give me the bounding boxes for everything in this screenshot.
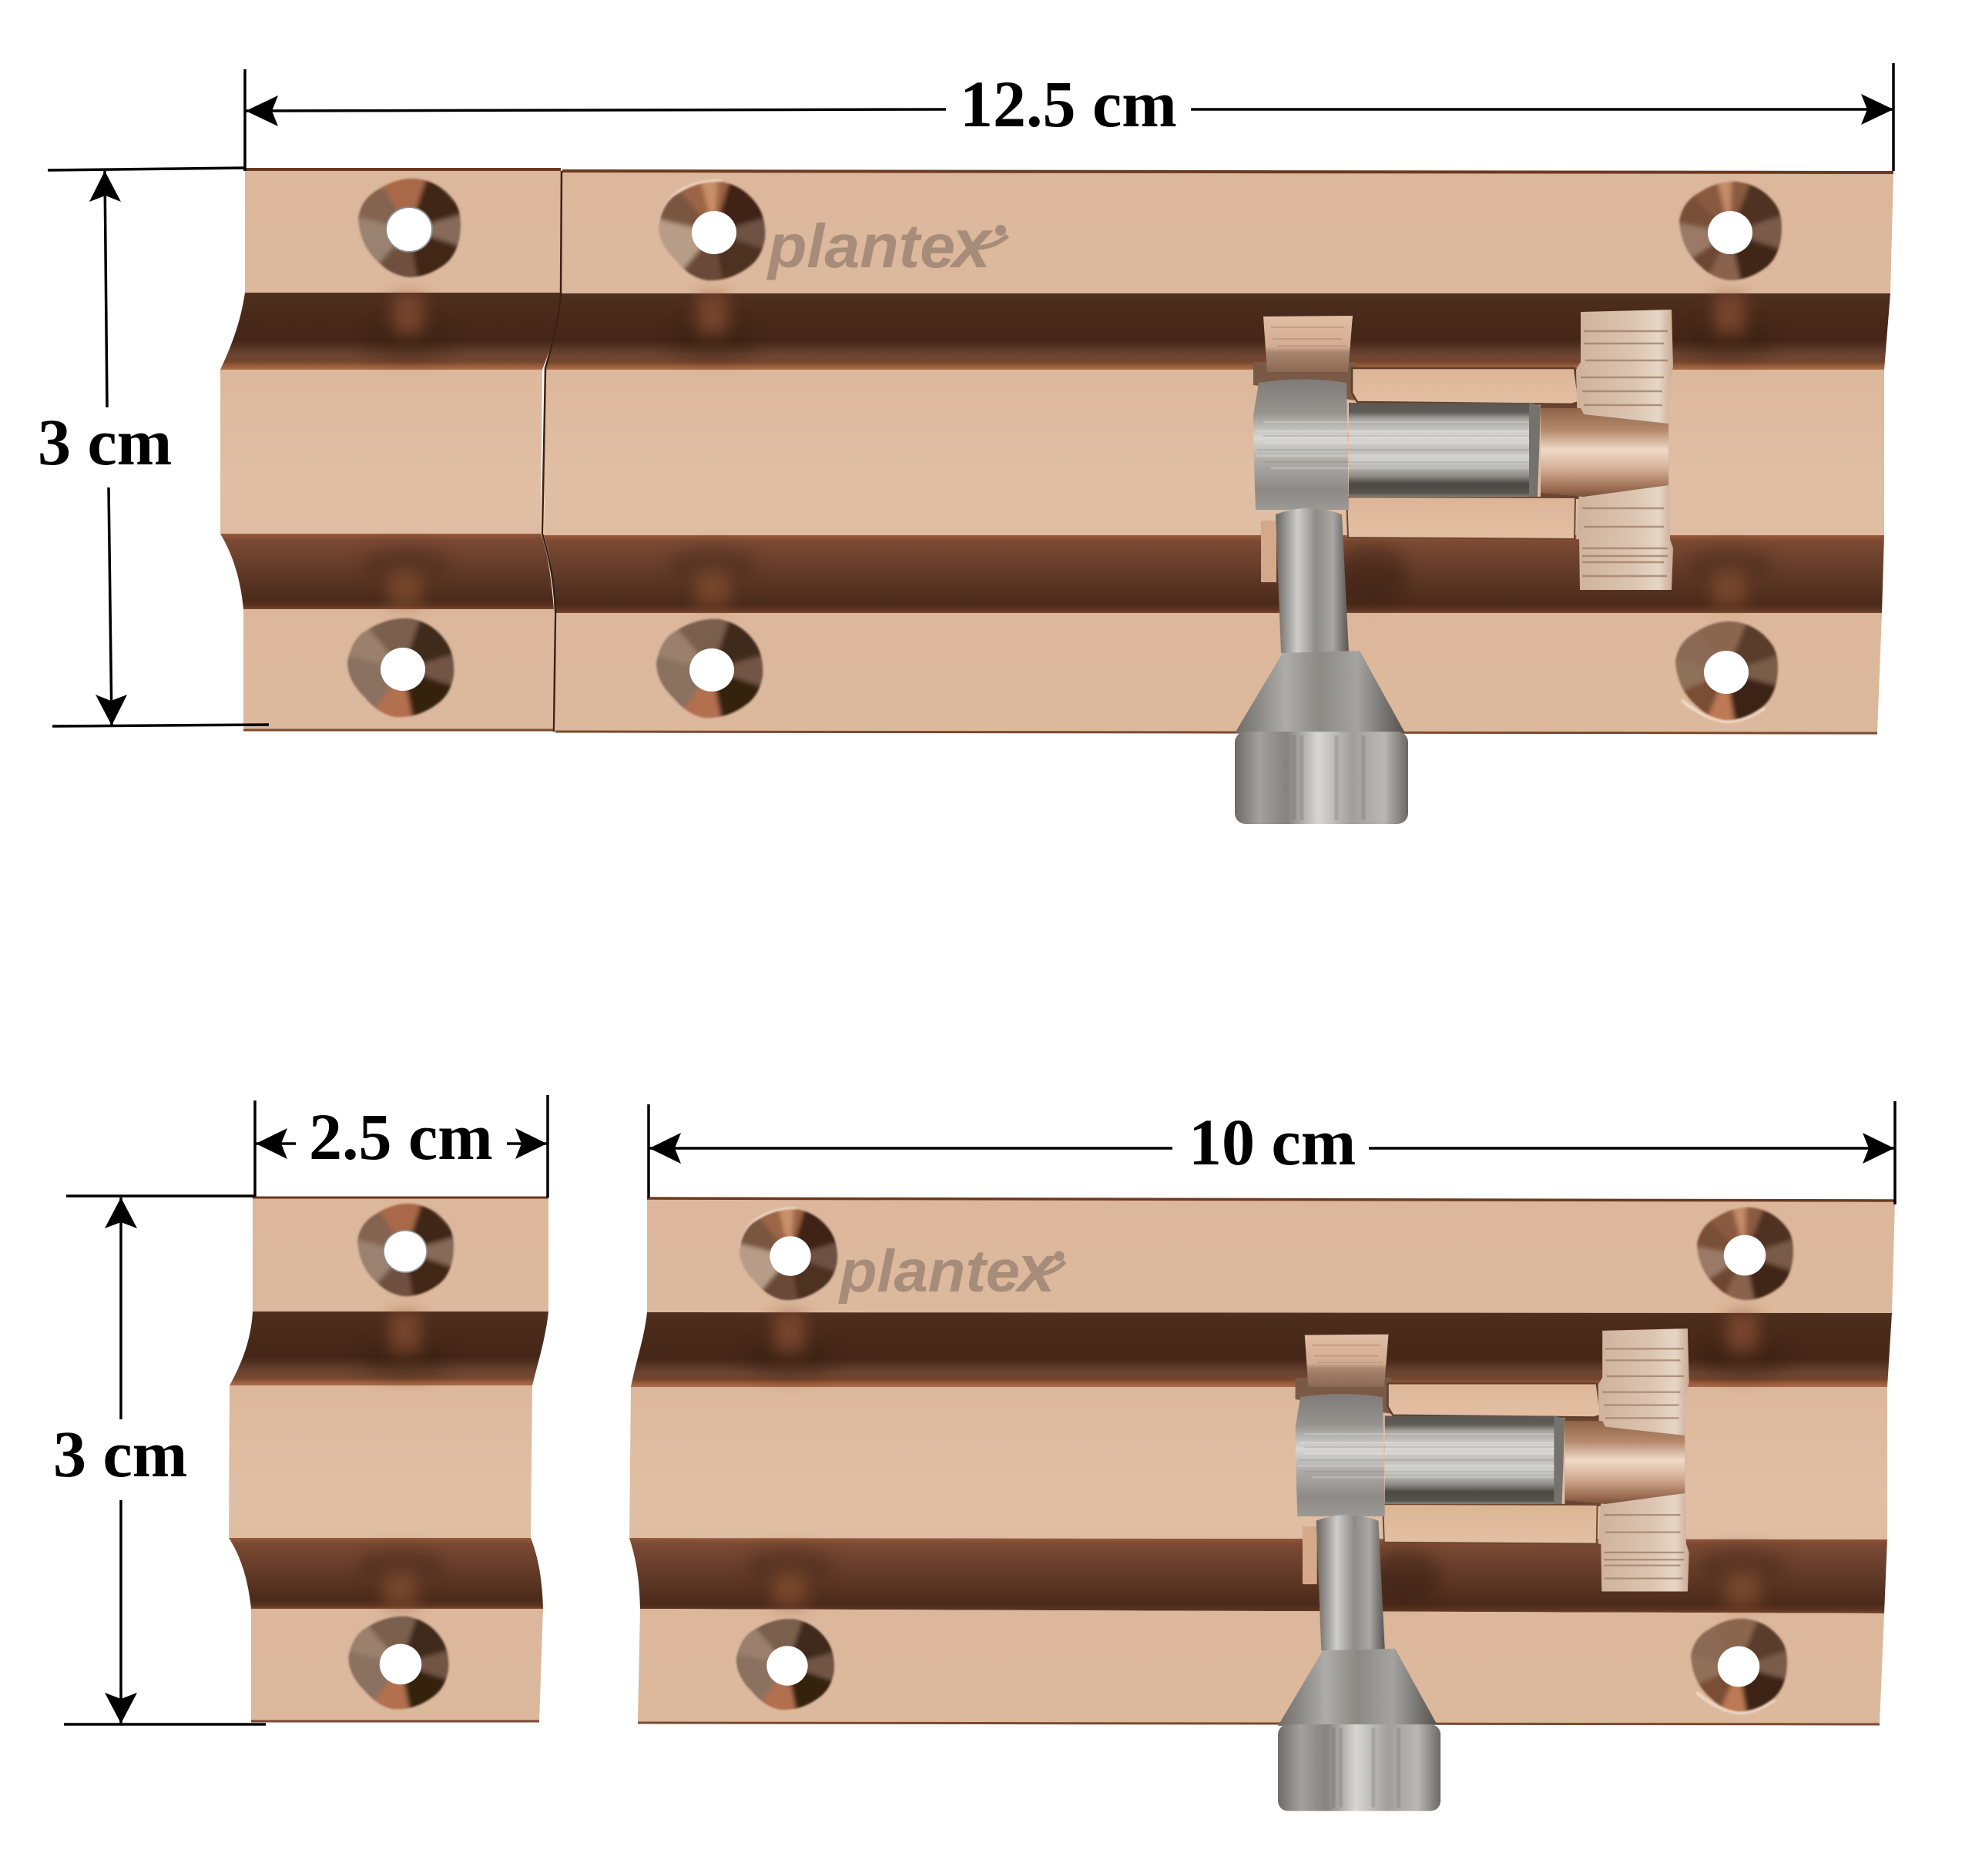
screw hole: main bottom right (1663, 611, 1788, 734)
dimension: 3 cm height of lower bolt (53, 1196, 266, 1724)
dimension: 3 cm height of upper bolt: 3 cm (38, 405, 172, 479)
screw hole: bottom right (1679, 1609, 1796, 1724)
dimension: 12.5 cm width (245, 63, 1893, 171)
brand logo (838, 1231, 1065, 1306)
dimension: 3 cm height of lower bolt: 3 cm (53, 1417, 187, 1491)
screw hole: keeper top (346, 168, 471, 291)
brand logo: plante (838, 1238, 1020, 1305)
bolt 12.5 cm: keeper piece (220, 168, 561, 731)
dimension: 2.5 cm keeper width: 2.5 cm (309, 1100, 493, 1174)
bolt 12.5 cm: main body (542, 171, 1893, 824)
dimension: 3 cm height of upper bolt (38, 168, 269, 726)
screw hole: top right (1685, 1198, 1803, 1313)
screw hole: main bottom left (649, 608, 773, 732)
screw hole: main top right (1667, 171, 1792, 294)
screw hole: keeper top (346, 1194, 463, 1309)
screw hole: top left (733, 1199, 847, 1313)
dimension: 2.5 cm keeper width (255, 1095, 548, 1198)
small keeper 2.5 cm wide (229, 1194, 548, 1722)
lower bolt 10 cm main body (629, 1198, 1895, 1811)
latch: sliding rod, staples and knob (1278, 1328, 1689, 1811)
brand logo (766, 206, 1008, 283)
dimension: 10 cm bolt width (649, 1101, 1895, 1204)
brand logo: x (949, 206, 994, 283)
latch: sliding rod, staples and knob (1235, 310, 1673, 824)
screw hole: main top left (651, 171, 776, 294)
dimension: 10 cm bolt width: 10 cm (1189, 1105, 1356, 1179)
screw hole: keeper bottom (341, 1606, 458, 1722)
brand logo: x (1015, 1231, 1058, 1306)
dimension: 12.5 cm width: 12.5 cm (960, 67, 1177, 141)
screw hole: bottom left (729, 1609, 844, 1723)
screw hole: keeper bottom (340, 608, 464, 731)
brand logo: plante (766, 212, 955, 280)
